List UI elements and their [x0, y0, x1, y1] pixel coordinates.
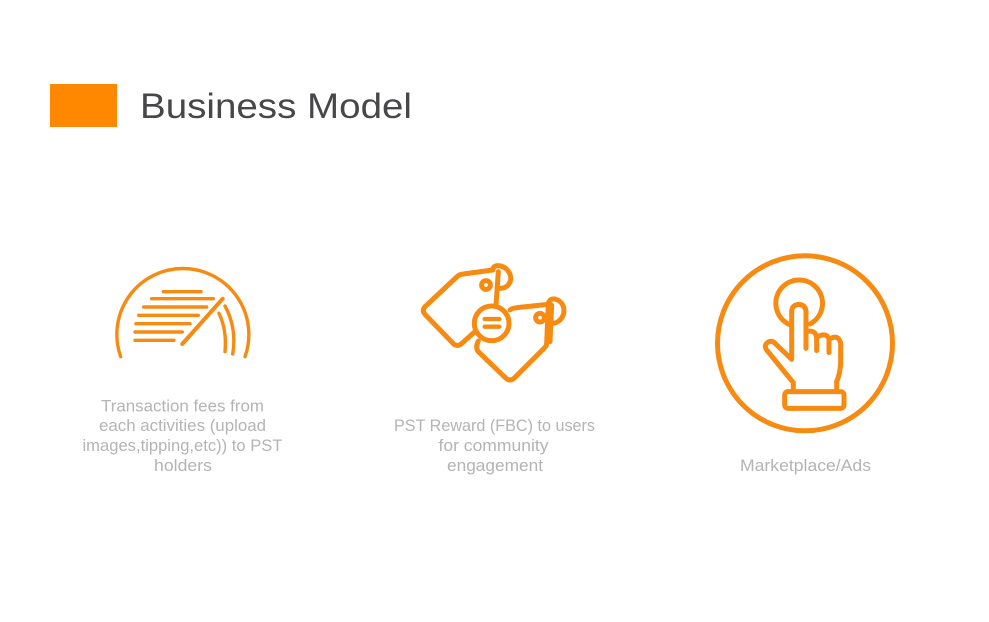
caption: PST reward: [394, 417, 595, 475]
caption: PST reward: for community: [438, 437, 549, 455]
icon: speedometer with lines: [117, 268, 249, 357]
caption: marketplace: Marketplace/Ads: [740, 457, 871, 475]
caption: PST reward: PST Reward (FBC) to users: [394, 417, 595, 435]
caption: transaction fees: images,tipping,etc)) to PST: [82, 437, 282, 455]
caption: transaction fees: each activities (upload: [99, 417, 266, 435]
caption: transaction fees: [82, 398, 282, 475]
panel: transaction fees: [82, 268, 282, 475]
caption: transaction fees: Transaction fees from: [101, 398, 264, 416]
icon: hand pressing a button in a circle: [718, 256, 892, 431]
header: [50, 84, 412, 127]
icon: two price tags with equals sign: [423, 266, 564, 380]
caption: transaction fees: holders: [154, 457, 212, 475]
panel: PST reward: [394, 266, 595, 475]
caption: PST reward: engagement: [447, 457, 543, 475]
panel: marketplace: [718, 256, 892, 475]
orange title block: [50, 84, 117, 127]
title: Business Model: [140, 87, 412, 126]
